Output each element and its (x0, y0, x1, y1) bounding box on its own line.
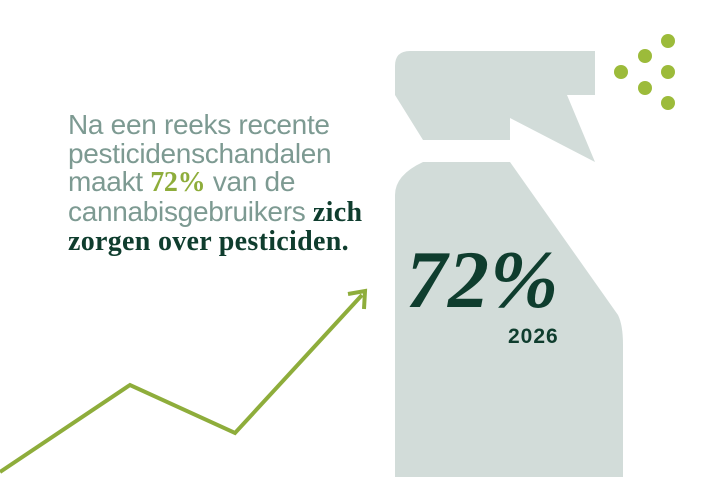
trend arrow (0, 291, 365, 472)
bottle body (395, 162, 623, 477)
main text block: maakt 72% van de (68, 166, 295, 198)
bottle trigger head (395, 51, 595, 162)
spray dots (614, 34, 675, 110)
main text block: pesticidenschandalen (68, 138, 331, 168)
year: 2026 (508, 325, 559, 348)
main text block: Na een reeks recente (68, 109, 330, 140)
big stat: 72% (406, 234, 559, 325)
main text block (68, 109, 362, 257)
main text block: cannabisgebruikers zich (68, 196, 362, 228)
main text block: zorgen over pesticiden. (68, 226, 349, 257)
